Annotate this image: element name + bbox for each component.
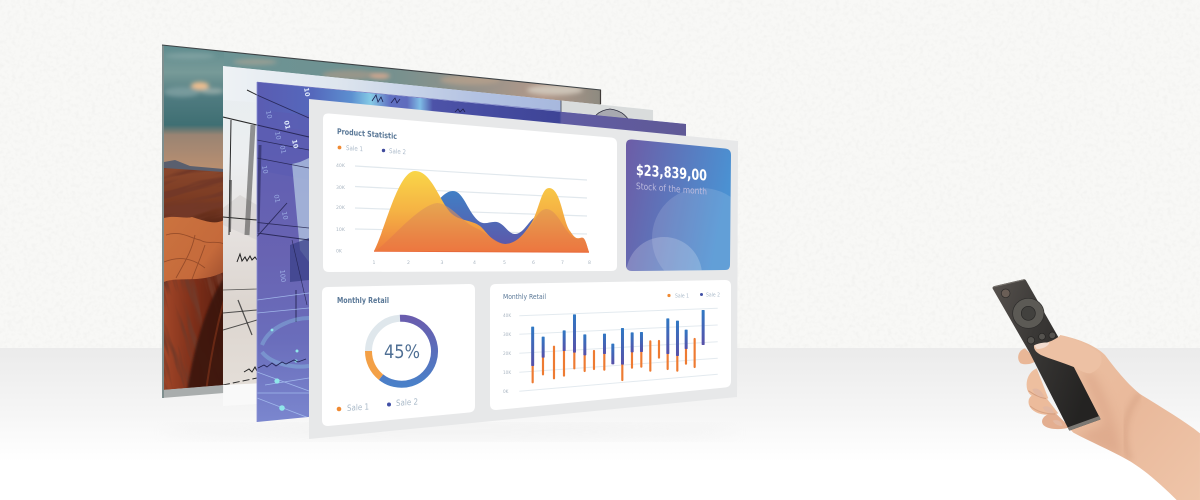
navigation ring bbox=[1013, 298, 1044, 328]
card: monthly retail donut bbox=[322, 284, 475, 426]
area series: sale 2 bbox=[430, 191, 589, 252]
grid and axis labels: 40K bbox=[503, 313, 511, 318]
screen layer: architectural sketch bbox=[223, 66, 653, 406]
binary digits: 01 bbox=[282, 120, 292, 131]
chart grid and axis labels: 3 bbox=[440, 260, 444, 266]
screen layer: landscape photo bbox=[162, 44, 602, 398]
binary digits: 10 bbox=[264, 110, 274, 120]
dashboard background bbox=[309, 99, 738, 439]
card: stock of the month bbox=[626, 140, 731, 271]
chart grid and axis labels: 40K bbox=[336, 163, 346, 169]
chart grid and axis labels: 0K bbox=[336, 248, 343, 254]
chart grid and axis labels: 20K bbox=[336, 205, 346, 211]
floor bbox=[0, 348, 1200, 500]
power button bbox=[1001, 289, 1010, 298]
grid and axis labels: 30K bbox=[503, 332, 511, 337]
chart grid and axis labels: 2 bbox=[407, 260, 410, 266]
floor shadow under screens bbox=[160, 424, 740, 440]
donut chart bbox=[368, 318, 435, 384]
screen layer: blue data scene bbox=[245, 82, 686, 424]
binary digits: 100 bbox=[278, 269, 287, 283]
grid and axis labels: 10K bbox=[503, 370, 511, 375]
legend: Sale 1 bbox=[675, 294, 689, 300]
binary digits: 01 bbox=[278, 145, 288, 155]
legend bbox=[338, 144, 406, 156]
stock label: Stock of the month bbox=[636, 182, 707, 198]
binary digits: 01 bbox=[272, 194, 282, 204]
data floor bbox=[262, 318, 309, 367]
centre button bbox=[1021, 306, 1035, 320]
function buttons bbox=[1027, 332, 1056, 344]
area series: sale 1 bbox=[374, 171, 589, 252]
grid and axis labels bbox=[503, 308, 718, 394]
chart grid and axis labels: 7 bbox=[561, 260, 564, 266]
chart grid and axis labels: 8 bbox=[588, 260, 591, 266]
hand holding remote control bbox=[993, 279, 1200, 500]
legend bbox=[667, 292, 720, 300]
remote body bbox=[993, 279, 1101, 431]
binary digits: 10 bbox=[260, 165, 270, 175]
binary digits: 10 bbox=[273, 131, 283, 141]
legend bbox=[337, 397, 418, 414]
chart grid and axis labels: 1 bbox=[372, 260, 376, 266]
legend: Sale 2 bbox=[389, 147, 406, 156]
rock face bbox=[164, 168, 223, 390]
donut value: 45% bbox=[384, 342, 420, 363]
legend: Sale 2 bbox=[396, 397, 418, 409]
palm and forearm bbox=[1060, 335, 1200, 500]
legend: Sale 1 bbox=[346, 144, 363, 153]
grid and axis labels: 20K bbox=[503, 351, 511, 356]
area overlay bbox=[377, 203, 589, 252]
chart grid and axis labels: 5 bbox=[503, 260, 506, 266]
thumb bbox=[1034, 336, 1102, 373]
card: product statistic area chart bbox=[323, 113, 617, 272]
background wall bbox=[0, 0, 1200, 348]
card title: Monthly Retail bbox=[503, 293, 546, 301]
chart grid and axis labels: 10K bbox=[336, 227, 346, 233]
card title: Monthly Retail bbox=[337, 296, 389, 305]
grid and axis labels: 0K bbox=[503, 389, 509, 394]
binary digits: 10 bbox=[302, 87, 312, 98]
chart grid and axis labels: 6 bbox=[532, 260, 535, 266]
card: monthly retail bar chart bbox=[490, 280, 731, 410]
stock amount: $23,839,00 bbox=[636, 161, 707, 185]
screen layer: dashboard front panel bbox=[309, 99, 752, 439]
binary digits bbox=[260, 87, 312, 283]
chart grid and axis labels bbox=[336, 163, 591, 266]
chart grid and axis labels: 30K bbox=[336, 185, 346, 191]
orange bars bbox=[533, 339, 695, 382]
fingers behind remote bbox=[1018, 348, 1070, 429]
legend: Sale 1 bbox=[347, 402, 369, 414]
binary digits: 10 bbox=[280, 211, 290, 221]
binary digits: 10 bbox=[290, 139, 300, 150]
chart grid and axis labels: 4 bbox=[473, 260, 476, 266]
finger nails bbox=[1032, 388, 1063, 426]
legend: Sale 2 bbox=[706, 292, 720, 298]
screen frame edges bbox=[162, 45, 601, 398]
card title: Product Statistic bbox=[337, 127, 397, 141]
blue bars bbox=[531, 310, 705, 366]
thumbnail bbox=[1034, 343, 1049, 349]
